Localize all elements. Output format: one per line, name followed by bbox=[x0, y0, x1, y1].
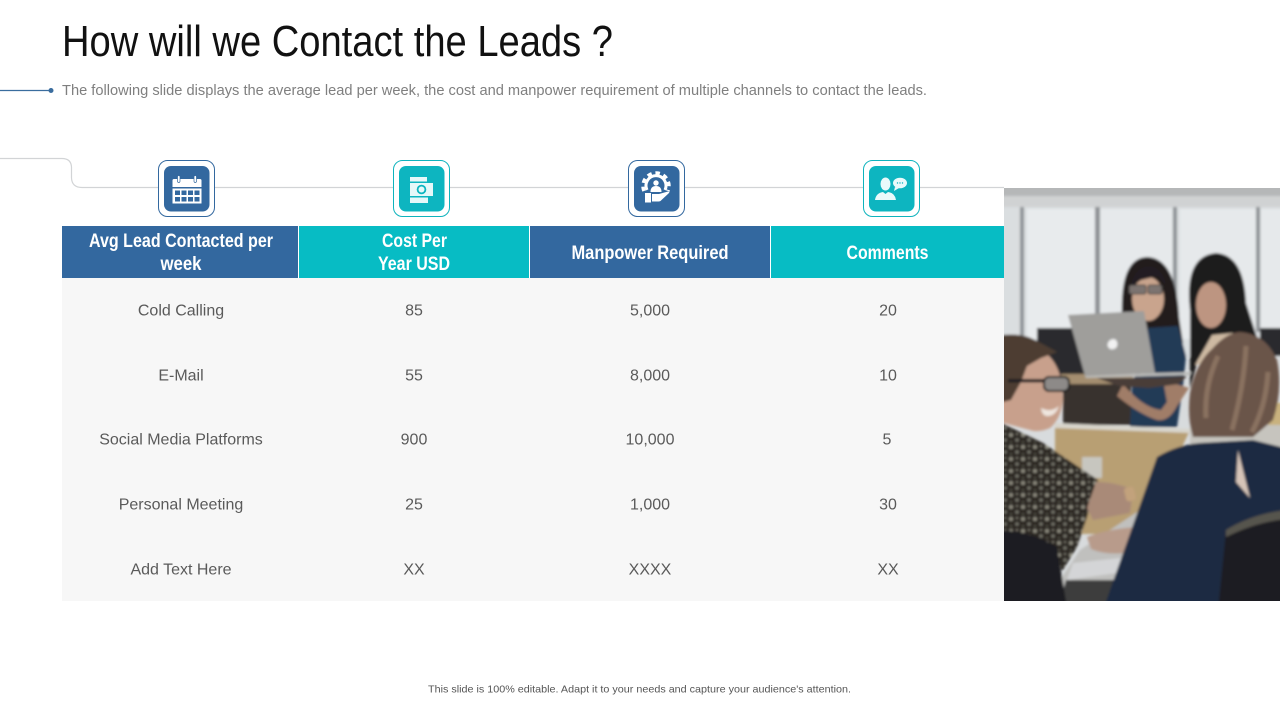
row: e-mail bbox=[158, 368, 897, 384]
header cell: cost: Year USD bbox=[378, 254, 450, 275]
row: cold calling: 5,000 bbox=[630, 302, 670, 320]
header cell: avg lead bbox=[62, 226, 298, 278]
row: add text here: Add Text Here bbox=[130, 562, 232, 578]
connector line bbox=[0, 158, 1004, 188]
row: cold calling bbox=[138, 302, 897, 320]
background desk bbox=[1037, 328, 1280, 461]
row: social media: 900 bbox=[401, 432, 427, 448]
row: personal meeting: 25 bbox=[405, 496, 423, 514]
photo: office meeting bbox=[990, 180, 1280, 610]
row: personal meeting: Personal Meeting bbox=[119, 496, 243, 514]
row: personal meeting: 30 bbox=[879, 496, 897, 514]
row: cold calling: 20 bbox=[879, 302, 897, 320]
header cell: avg lead: Avg Lead Contacted per bbox=[89, 231, 274, 252]
row: add text here: XX bbox=[403, 562, 425, 578]
icon: calendar bbox=[158, 160, 214, 216]
row: social media: 5 bbox=[883, 432, 892, 448]
title: How will we Contact the Leads ? bbox=[62, 17, 613, 66]
ceiling and window blinds bbox=[990, 180, 1280, 357]
row: social media bbox=[99, 432, 892, 448]
header cell: cost: Cost Per bbox=[382, 231, 447, 252]
row: e-mail: 10 bbox=[879, 368, 897, 384]
row: cold calling: 85 bbox=[405, 302, 423, 320]
icon: person with speech bubble bbox=[864, 160, 920, 216]
table bbox=[62, 226, 1004, 601]
standing woman right bbox=[1189, 253, 1260, 389]
desk and papers bbox=[1060, 511, 1139, 601]
row: personal meeting bbox=[119, 496, 897, 514]
header cell: comments: Comments bbox=[846, 243, 928, 264]
row: personal meeting: 1,000 bbox=[630, 496, 670, 514]
standing woman left bbox=[1117, 257, 1189, 427]
row: e-mail: 55 bbox=[405, 368, 423, 384]
smiling woman bbox=[995, 335, 1137, 607]
row: add text here: XX bbox=[877, 562, 899, 578]
icon: money bbox=[394, 160, 450, 216]
row: add text here bbox=[130, 562, 899, 578]
row: add text here: XXXX bbox=[629, 562, 672, 578]
row: social media: Social Media Platforms bbox=[99, 432, 263, 448]
cubicle partition bbox=[1055, 423, 1190, 534]
row: e-mail: 8,000 bbox=[630, 368, 670, 384]
subtitle text: The following slide displays the average lead per week, the cost and manpower requirement of multiple channels to contact the leads. bbox=[62, 83, 927, 99]
row: e-mail: E-Mail bbox=[158, 368, 204, 384]
header cell: manpower: Manpower Required bbox=[572, 243, 728, 264]
footer note: This slide is 100% editable. Adapt it to your needs and capture your audience's attention. bbox=[428, 684, 851, 696]
row: cold calling: Cold Calling bbox=[138, 302, 224, 320]
header cell: avg lead: week bbox=[160, 254, 202, 275]
icon: manpower gear and hand bbox=[628, 160, 684, 216]
woman from behind bbox=[1103, 332, 1280, 610]
header cell: comments bbox=[771, 226, 1004, 278]
table body background bbox=[62, 278, 1004, 601]
row: social media: 10,000 bbox=[626, 432, 675, 448]
laptop bbox=[1068, 311, 1192, 388]
header cell: cost bbox=[299, 226, 529, 278]
header cell: manpower bbox=[530, 226, 770, 278]
subtitle pointer line bbox=[0, 88, 54, 93]
